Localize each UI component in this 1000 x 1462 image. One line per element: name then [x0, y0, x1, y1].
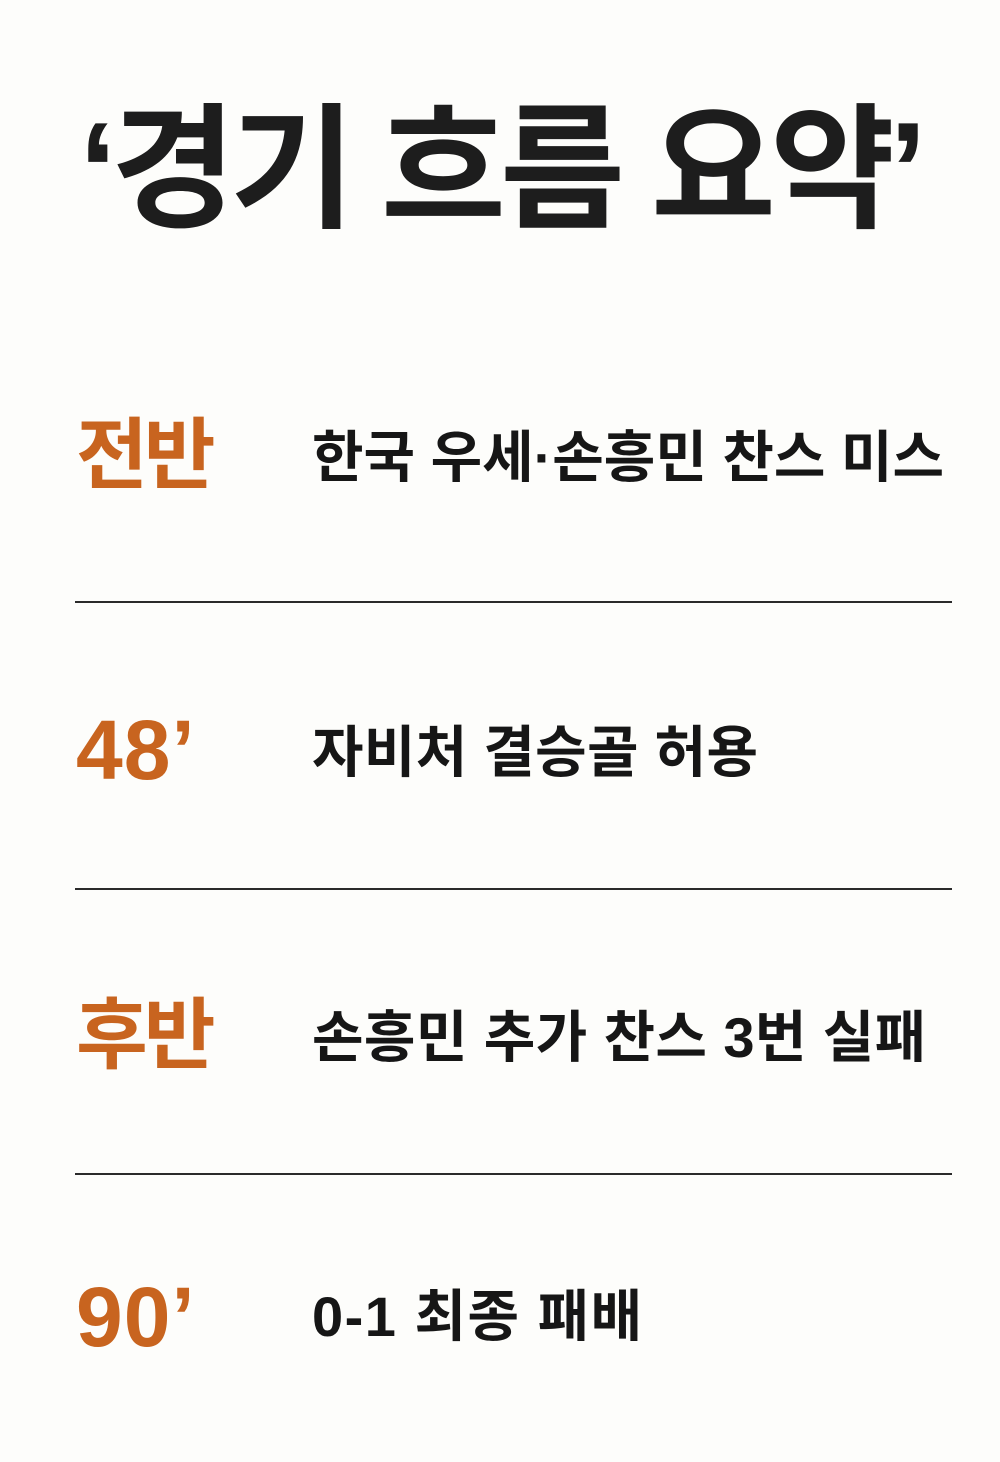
row: first half — [76, 411, 944, 499]
text: final result: 0-1 최종 패배 — [312, 1285, 644, 1348]
title: ‘경기 흐름 요약’ — [79, 94, 921, 246]
row: 48 minute — [76, 703, 758, 797]
text: goal conceded: 자비처 결승골 허용 — [312, 721, 758, 784]
row: second half — [76, 991, 927, 1079]
label: 전반: 전반 — [76, 411, 212, 499]
text: second half: 손흥민 추가 찬스 3번 실패 — [312, 1006, 927, 1069]
label: 48': 48’ — [76, 703, 196, 797]
row: 90 minute — [76, 1270, 644, 1364]
text: first half: 한국 우세·손흥민 찬스 미스 — [312, 426, 944, 489]
label: 후반: 후반 — [76, 991, 212, 1079]
label: 90': 90’ — [76, 1270, 196, 1364]
